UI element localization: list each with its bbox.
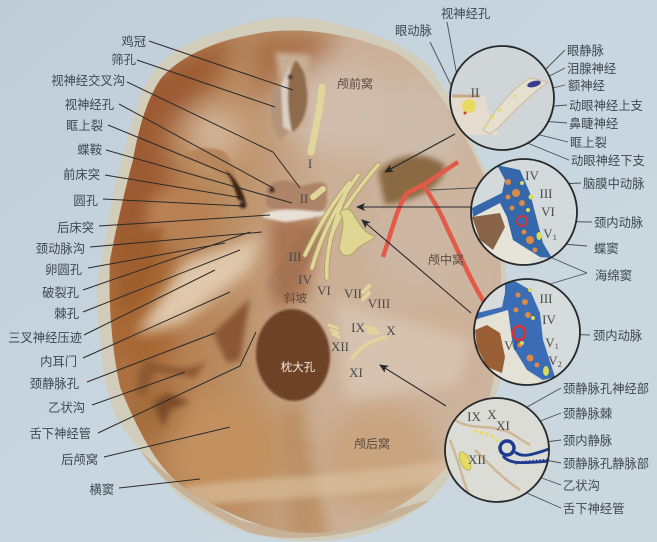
left labels: 内耳门 — [40, 354, 77, 369]
fossa and nerve labels: 颅中窝 — [428, 252, 464, 267]
nerves IX X XI — [352, 327, 386, 358]
fossa and nerve labels: II — [300, 191, 308, 206]
right labels: 颈内动脉 — [594, 215, 643, 230]
fossa and nerve labels: I — [308, 156, 312, 171]
nerve XII — [329, 325, 339, 337]
left labels: 前床突 — [63, 167, 100, 182]
right labels: 颈内静脉 — [563, 433, 612, 448]
cranial nerves — [305, 87, 386, 358]
fossa and nerve labels: VI — [317, 283, 331, 298]
right labels: 动眼神经上支 — [569, 99, 643, 113]
left labels: 后颅窝 — [61, 452, 98, 467]
left labels: 筛孔 — [111, 52, 136, 67]
label: foramen magnum: 枕大孔 — [281, 360, 316, 374]
right labels: 蝶窦 — [594, 241, 619, 256]
fossa and nerve labels: X — [386, 323, 396, 338]
fossa and nerve labels: VII — [344, 286, 362, 301]
fossa and nerve labels: 颅后窝 — [354, 436, 390, 451]
left labels: 蝶鞍 — [77, 142, 102, 157]
left labels: 鸡冠 — [121, 34, 146, 49]
inset circle: cavernous sinus lower: VI — [504, 338, 518, 353]
left labels: 视神经交叉沟 — [51, 73, 125, 88]
inset circle: optic canal and superior orbital fissure: II — [471, 85, 479, 100]
left labels: 视神经孔 — [65, 97, 114, 112]
nerves VII VIII — [363, 286, 369, 299]
fossa and nerve labels: XII — [331, 339, 349, 354]
fossa and nerve labels: 斜坡 — [284, 292, 307, 305]
inset circle: cavernous sinus lower — [470, 279, 580, 392]
trigeminal ganglion — [339, 209, 375, 256]
right labels: 脑膜中动脉 — [583, 176, 644, 191]
right labels: 颈静脉孔静脉部 — [563, 456, 649, 471]
right labels: 动眼神经下支 — [571, 154, 645, 168]
right labels: 泪腺神经 — [567, 62, 616, 76]
arrows — [357, 134, 475, 406]
left labels: 圆孔 — [73, 194, 98, 208]
nerve II — [313, 189, 323, 197]
cranial fossae — [110, 30, 502, 533]
fossa and nerve labels: XI — [349, 365, 363, 380]
right labels: 鼻睫神经 — [569, 116, 618, 131]
left labels — [8, 34, 146, 497]
fossa and nerve labels: VIII — [368, 296, 390, 311]
right labels: 舌下神经管 — [563, 501, 624, 516]
inset circle: cavernous sinus upper: VI — [541, 204, 555, 219]
left labels: 三叉神经压迹 — [8, 331, 82, 345]
foramen magnum — [253, 307, 333, 403]
right labels: 眼动脉 — [395, 23, 432, 38]
inset circle: cavernous sinus upper: III — [540, 186, 552, 201]
right labels: 视神经孔 — [441, 6, 490, 21]
crista galli and cribriform — [271, 60, 307, 140]
right labels: 颈内动脉 — [593, 328, 642, 343]
right labels: 海绵窦 — [595, 268, 632, 283]
nerves III IV V VI bundle — [305, 165, 378, 278]
left labels: 眶上裂 — [66, 119, 103, 133]
left labels: 后床突 — [57, 220, 94, 235]
inset circle: jugular foramen: IX — [467, 409, 481, 424]
leader lines right — [430, 22, 592, 508]
right labels: 额神经 — [568, 79, 605, 93]
inset circle: jugular foramen: XII — [468, 452, 486, 467]
inset circle: cavernous sinus lower: V — [545, 335, 555, 350]
left labels: 颈静脉孔 — [30, 376, 79, 391]
left labels: 卵圆孔 — [45, 263, 82, 277]
middle meningeal artery — [383, 162, 486, 305]
inset circle: cavernous sinus upper: IV — [525, 168, 539, 183]
inset circle: cavernous sinus lower: IV — [542, 312, 556, 327]
left labels: 破裂孔 — [42, 285, 79, 300]
left labels: 乙状沟 — [48, 401, 85, 415]
inset circle: jugular foramen — [445, 398, 550, 502]
fossa and nerve labels — [284, 76, 464, 451]
fossa and nerve labels: III — [288, 249, 302, 264]
right labels — [395, 6, 649, 516]
fossa and nerve labels: 颅前窝 — [337, 76, 373, 91]
sella and optic canal region — [175, 148, 327, 300]
right labels: 颈静脉棘 — [563, 406, 612, 421]
left labels: 舌下神经管 — [30, 426, 91, 441]
skull rim — [97, 17, 507, 541]
fossa and nerve labels: IV — [298, 272, 312, 287]
skull base illustration — [90, 10, 520, 541]
right labels: 颈静脉孔神经部 — [563, 381, 649, 396]
leader lines left — [83, 41, 300, 488]
inset circle: cavernous sinus upper: V — [543, 226, 553, 241]
nerve I — [311, 87, 322, 152]
right labels: 眼静脉 — [567, 43, 604, 58]
inset circle: optic canal and superior orbital fissure — [450, 46, 554, 150]
inset circle: cavernous sinus upper — [470, 159, 577, 270]
left anterior brown region — [110, 30, 456, 520]
inset circle: cavernous sinus lower: III — [540, 291, 552, 306]
right labels: 乙状沟 — [563, 479, 600, 493]
right labels: 眶上裂 — [570, 136, 607, 150]
inset circle: cavernous sinus lower: 1 — [555, 342, 559, 351]
inset circle: cavernous sinus lower: 2 — [558, 360, 562, 369]
inset circle: cavernous sinus lower: V — [548, 353, 558, 368]
inset circle: jugular foramen: X — [487, 407, 497, 422]
left labels: 横窦 — [89, 483, 114, 497]
fossa and nerve labels: IX — [351, 320, 365, 335]
left labels: 颈动脉沟 — [36, 241, 85, 256]
inset circle: cavernous sinus upper: 1 — [553, 233, 557, 242]
left labels: 棘孔 — [54, 307, 79, 321]
inset circle: jugular foramen: XI — [496, 418, 510, 433]
